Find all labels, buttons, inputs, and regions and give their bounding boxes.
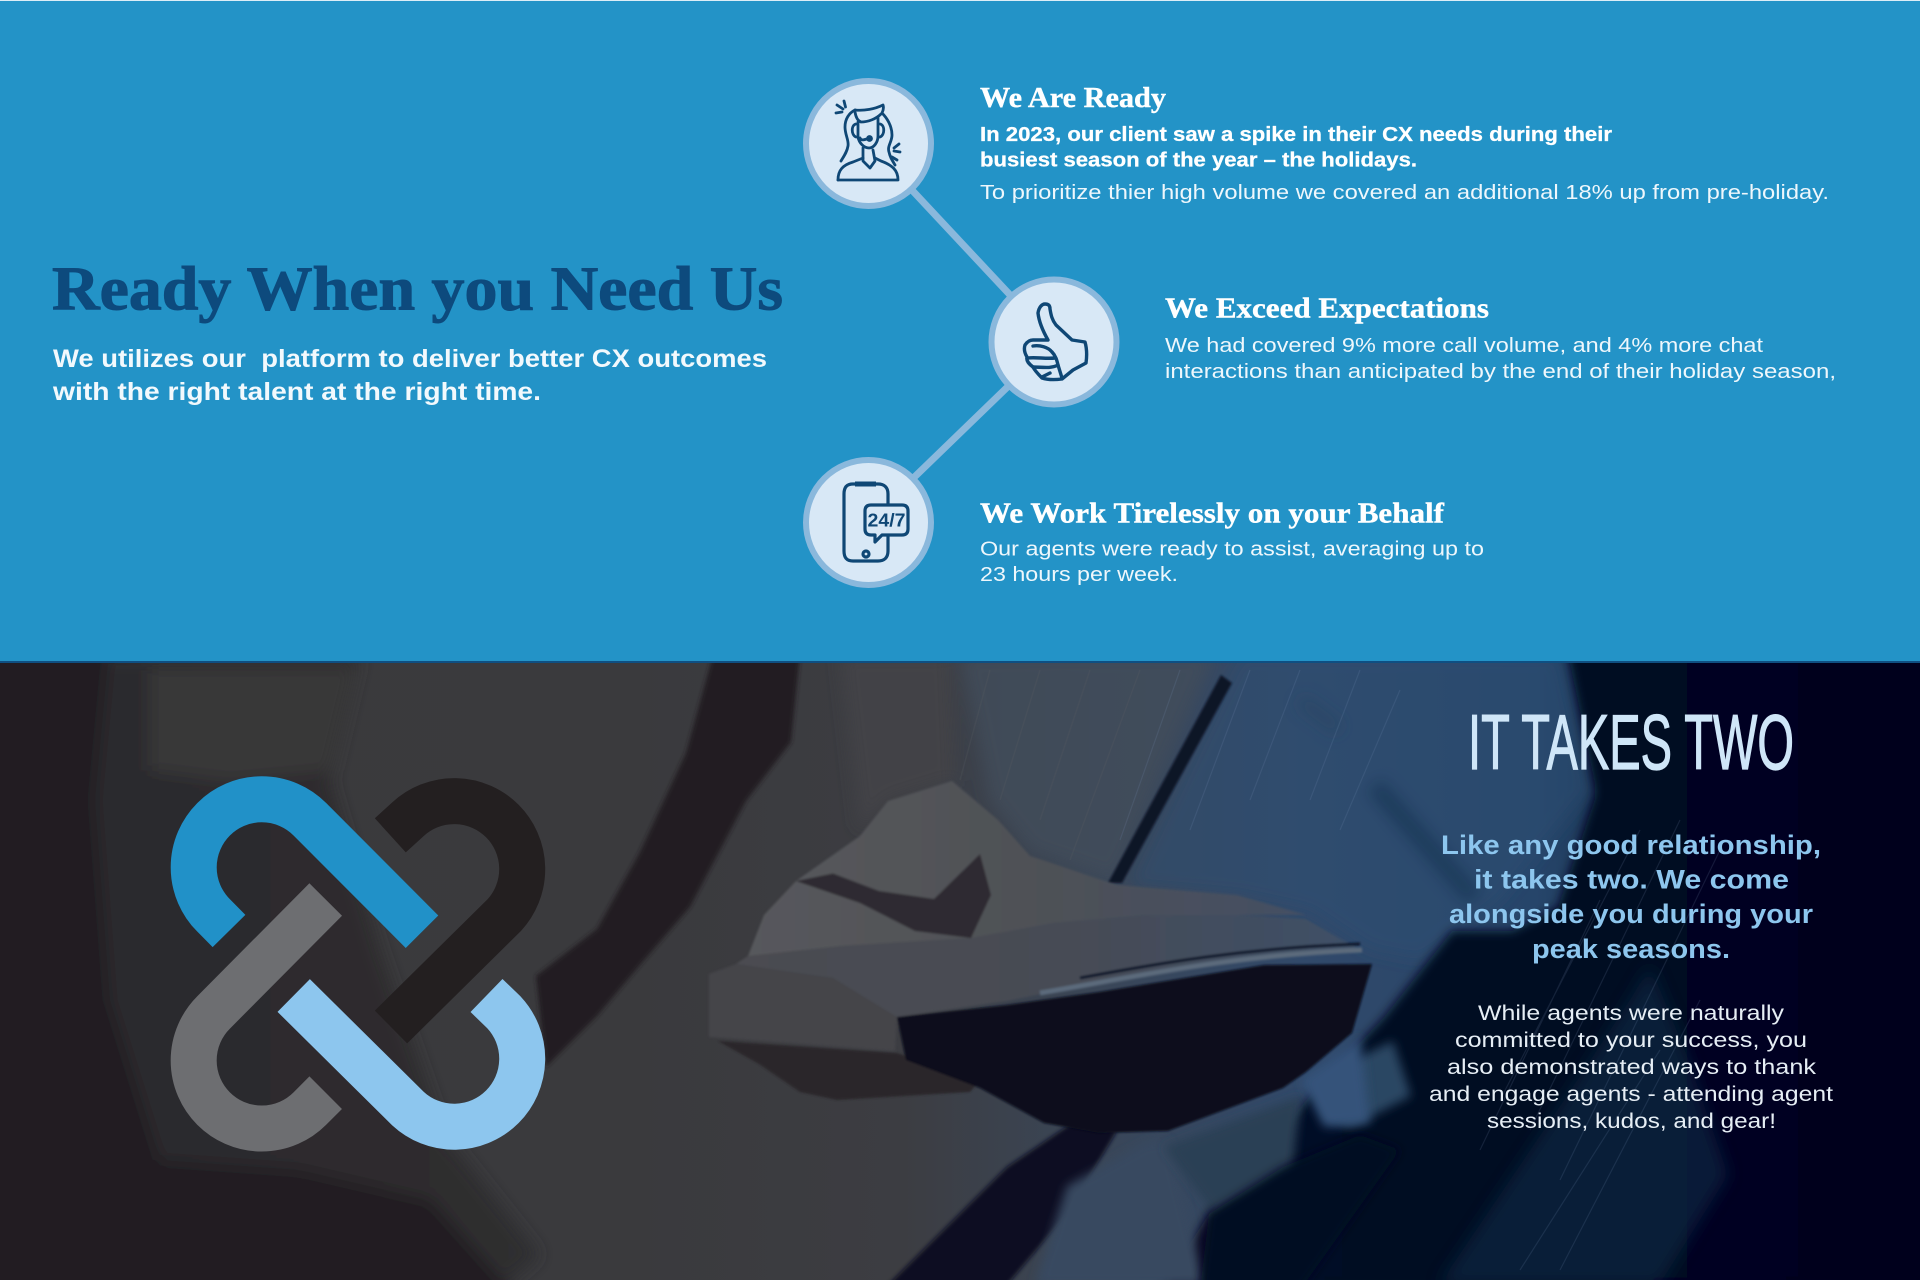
- subtitle: with the right talent at the right time.: [52, 378, 541, 406]
- panel: bottom photo section: [0, 640, 1920, 1280]
- text block: we are ready: We Are Ready: [980, 83, 1166, 114]
- text block: we work tirelessly: 23 hours per week.: [980, 563, 1178, 586]
- icon: phone 24/7: 24/7: [868, 510, 906, 530]
- text block: we exceed expectations: We Exceed Expectations: [1165, 294, 1489, 324]
- text block: we are ready: In 2023, our client saw a spike in their CX needs during their: [980, 124, 1612, 146]
- text block: we are ready: [980, 83, 1829, 204]
- background photo: blurred runner and shoe: [0, 640, 1920, 1280]
- text block: relationship statement: peak seasons.: [1532, 934, 1730, 964]
- connector lines: [868, 143, 1054, 522]
- text block: we work tirelessly: We Work Tirelessly on your Behalf: [980, 498, 1445, 530]
- text block: we are ready: busiest season of the year – the holidays.: [980, 150, 1417, 172]
- text block: agents paragraph: and engage agents - attending agent: [1429, 1083, 1833, 1106]
- text block: we work tirelessly: [980, 498, 1484, 586]
- motion streaks: [1120, 670, 1720, 1270]
- subtitle: We utilizes our platform to deliver better CX outcomes: [53, 345, 767, 373]
- text block: we work tirelessly: Our agents were ready to assist, averaging up to: [980, 538, 1484, 560]
- text block: relationship statement: it takes two. We come: [1474, 864, 1789, 894]
- icon: thumbs up: [992, 280, 1116, 404]
- logo link: blue: [194, 799, 422, 932]
- text block: we exceed expectations: We had covered 9% more call volume, and 4% more chat: [1165, 334, 1763, 357]
- right dark tyre: [1160, 650, 1920, 1280]
- text block: agents paragraph: also demonstrated ways to thank: [1447, 1056, 1817, 1079]
- subtitle: [52, 345, 767, 406]
- text block: agents paragraph: committed to your success, you: [1455, 1029, 1807, 1052]
- text block: we exceed expectations: interactions than anticipated by the end of their holiday season,: [1165, 360, 1836, 383]
- light patch beside tyre: [1338, 1038, 1414, 1131]
- text block: agents paragraph: sessions, kudos, and gear!: [1487, 1110, 1776, 1133]
- text block: relationship statement: [1441, 830, 1821, 964]
- text block: relationship statement: Like any good relationship,: [1441, 830, 1821, 860]
- text block: we are ready: To prioritize thier high volume we covered an additional 18% up from pre-holiday.: [980, 181, 1829, 204]
- logo link: light blue: [294, 996, 522, 1127]
- text block: relationship statement: alongside you during your: [1449, 899, 1814, 929]
- icon: agent with headset: [806, 81, 931, 206]
- dark arm band: [536, 655, 800, 1067]
- logo link: grey: [194, 900, 326, 1129]
- text block: agents paragraph: [1429, 1002, 1833, 1133]
- logo link: dark: [390, 801, 522, 1027]
- icon: phone 24/7: [806, 460, 931, 585]
- streaked wall behind shoe: [934, 663, 1576, 894]
- tyre tread glow: [1439, 966, 1728, 1280]
- dark strips: [1108, 675, 1232, 883]
- title: Ready When you Need Us: [52, 256, 783, 324]
- logo: interlocking links: [194, 799, 522, 1129]
- shoe: [709, 781, 1372, 1133]
- text block: we exceed expectations: [1165, 294, 1836, 383]
- panel: top blue section: [0, 0, 1920, 663]
- text block: agents paragraph: While agents were naturally: [1478, 1002, 1785, 1025]
